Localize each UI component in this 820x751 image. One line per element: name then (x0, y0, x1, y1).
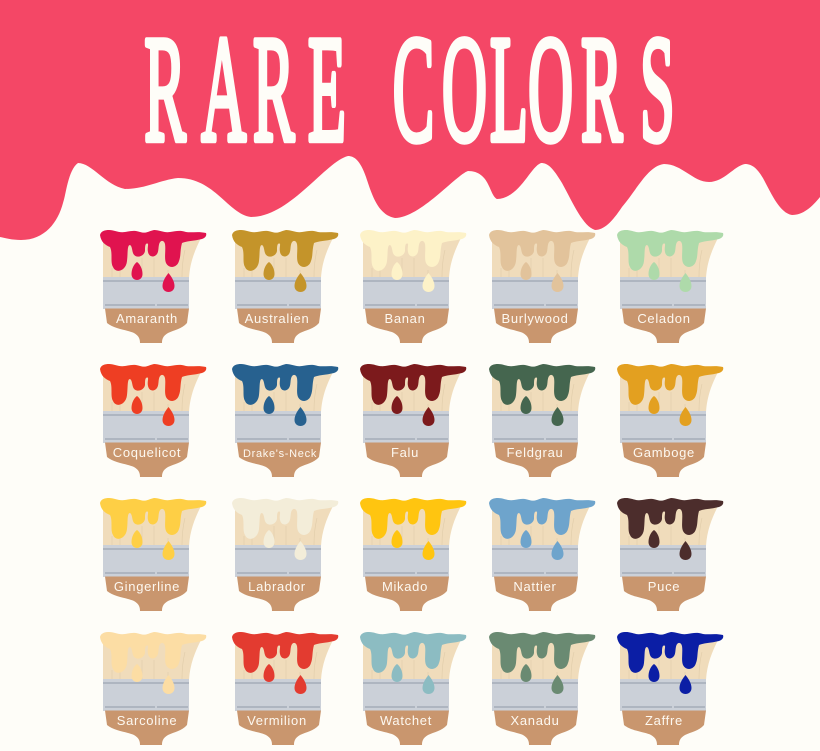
brush: Australien: Australien (245, 311, 309, 326)
brush: Vermilion (232, 632, 338, 745)
brush: Burlywood (489, 230, 595, 343)
brush: Feldgrau: Feldgrau (507, 445, 563, 460)
brush: Celadon (617, 230, 723, 343)
brush: Banan: Banan (384, 311, 426, 326)
brush: Labrador (232, 498, 338, 611)
brush: Gingerline (100, 498, 206, 611)
title: RARE COLORS (144, 5, 675, 174)
brush: Drake's-Neck (232, 364, 338, 477)
brush: Sarcoline: Sarcoline (117, 713, 177, 728)
brush: Zaffre (617, 632, 723, 745)
brush: Feldgrau (489, 364, 595, 477)
brush: Nattier: Nattier (513, 579, 557, 594)
dripping paint header (0, 0, 820, 240)
brush: Drake's-Neck: Drake's-Neck (243, 448, 317, 460)
brush: Xanadu: Xanadu (510, 713, 560, 728)
brush: Amaranth: Amaranth (116, 311, 178, 326)
brush: Banan (360, 230, 466, 343)
brush: Gamboge: Gamboge (633, 445, 695, 460)
brush: Labrador: Labrador (248, 579, 306, 594)
brush: Sarcoline (100, 632, 206, 745)
brush: Vermilion: Vermilion (247, 713, 307, 728)
brush: Mikado (360, 498, 466, 611)
brush: Celadon: Celadon (637, 311, 691, 326)
brush: Zaffre: Zaffre (645, 713, 683, 728)
brush: Gingerline: Gingerline (114, 579, 180, 594)
brush: Watchet (360, 632, 466, 745)
brush: Puce (617, 498, 723, 611)
brush: Mikado: Mikado (382, 579, 428, 594)
brush: Coquelicot: Coquelicot (113, 445, 181, 460)
brush: Burlywood: Burlywood (502, 311, 568, 326)
brush: Amaranth (100, 230, 206, 343)
brush: Falu: Falu (391, 445, 419, 460)
brush: Puce: Puce (648, 579, 680, 594)
brush: Nattier (489, 498, 595, 611)
brush: Australien (232, 230, 338, 343)
brush: Coquelicot (100, 364, 206, 477)
brush: Falu (360, 364, 466, 477)
brush: Xanadu (489, 632, 595, 745)
brush: Gamboge (617, 364, 723, 477)
brush: Watchet: Watchet (380, 713, 432, 728)
